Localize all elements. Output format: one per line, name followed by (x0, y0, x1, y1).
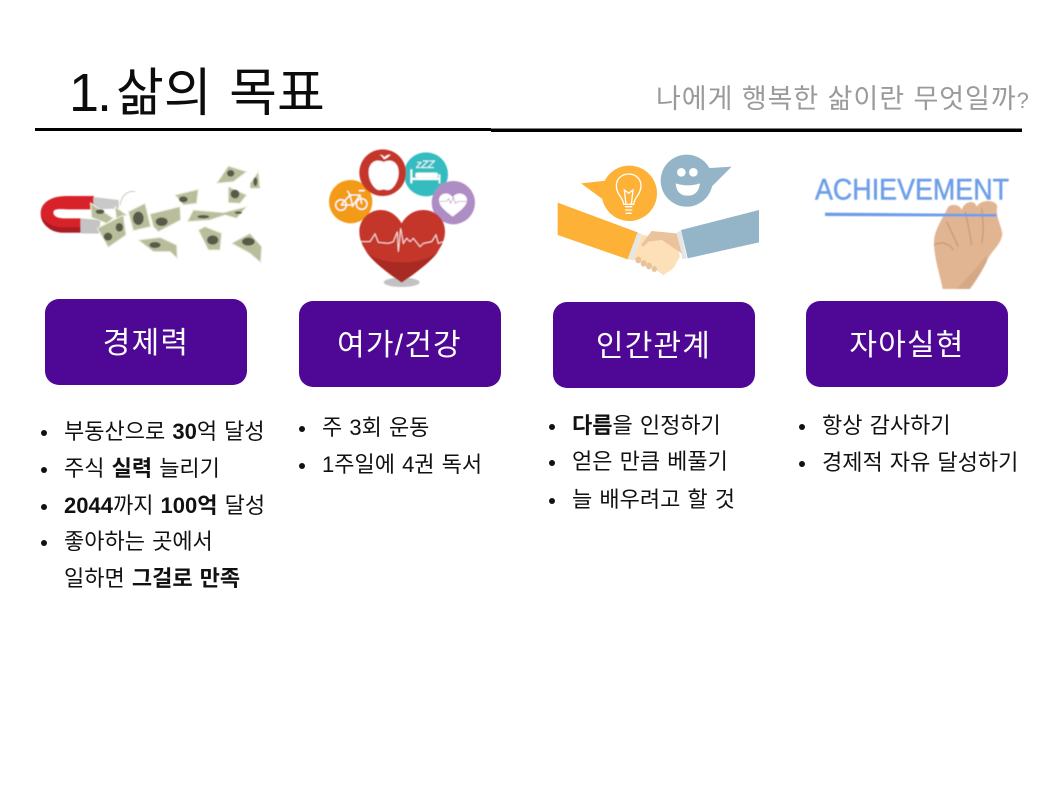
text block: economy list: 주식 실력 늘리기 (64, 456, 220, 481)
button: self-realization: 자아실현 (849, 329, 965, 362)
text block: leisure list: 주 3회 운동 (322, 415, 429, 440)
button: self-realization (806, 301, 1008, 387)
icon: magnet attracting money (40, 165, 262, 264)
icon: health and leisure heart (328, 148, 476, 288)
button: relationships: 인간관계 (596, 330, 711, 363)
text block: economy list (41, 419, 265, 591)
text block: relationships list: 다름을 인정하기 (572, 413, 721, 438)
hands (632, 234, 680, 275)
text block: leisure list: 1주일에 4권 독서 (322, 452, 482, 477)
icon: smile bubble (661, 155, 732, 207)
icon: health and leisure heart: zZZ (415, 159, 436, 171)
text block: self-realization list: 경제적 자유 달성하기 (822, 450, 1018, 475)
text block: economy list: 부동산으로 30억 달성 (64, 419, 265, 444)
text block: relationships list: 늘 배우려고 할 것 (572, 487, 735, 512)
text block: economy list: 2044까지 100억 달성 (64, 493, 265, 518)
button: economy: 경제력 (103, 327, 189, 360)
text block: self-realization list: 항상 감사하기 (822, 413, 951, 438)
title rule (35, 128, 1022, 132)
right arm (681, 210, 759, 258)
text block: self-realization list (799, 413, 1018, 475)
text block: leisure list (299, 415, 482, 477)
icon: bicycle (336, 191, 367, 210)
title: 1.삶의 목표 (69, 63, 325, 123)
icon: bed (410, 169, 440, 183)
button: economy (45, 299, 247, 385)
icon: small heart (439, 193, 467, 217)
icon: handshake and speech bubbles (558, 154, 759, 275)
button: relationships (552, 302, 754, 388)
text block: relationships list (549, 413, 735, 512)
button: leisure and health (298, 301, 500, 387)
subtitle: 나에게 행복한 삶이란 무엇일까? (656, 84, 1030, 114)
icon: large heart (359, 210, 445, 283)
icon: lightbulb bubble (581, 166, 657, 221)
icon: apple (369, 155, 399, 190)
button: leisure and health: 여가/건강 (337, 329, 462, 362)
text block: economy list: 일하면 그걸로 만족 (64, 566, 240, 591)
text block: relationships list: 얻은 만큼 베풀기 (572, 449, 728, 474)
left arm (558, 203, 638, 259)
text block: economy list: 좋아하는 곳에서 (64, 529, 213, 554)
icon: achievement hand (814, 173, 1010, 290)
